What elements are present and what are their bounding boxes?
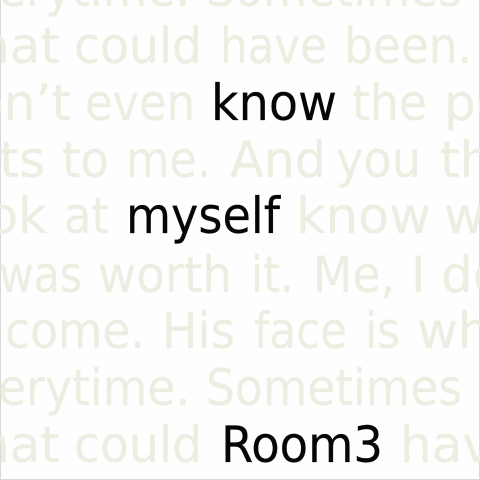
background lyric text: And — [230, 131, 326, 189]
background lyric text: could — [74, 17, 202, 75]
background lyric text: erytime. — [0, 359, 190, 417]
background lyric text: is — [365, 302, 400, 360]
background lyric text: His — [162, 302, 235, 360]
background lyric text: face — [254, 302, 347, 360]
background lyric text: Me, — [313, 246, 395, 304]
background lyric text: Sometimes — [206, 359, 462, 417]
background lyric text: ts — [0, 131, 45, 189]
background lyric text: come. — [5, 302, 145, 360]
word: myself: myself — [126, 187, 281, 245]
background lyric text: even — [85, 74, 195, 132]
background lyric text: worth — [98, 246, 232, 304]
background lyric text: you — [336, 131, 421, 189]
background lyric text: the — [352, 74, 427, 132]
background lyric text: to — [62, 131, 109, 189]
background lyric text: at — [64, 187, 109, 245]
background lyric text: could — [74, 416, 202, 474]
word: know: know — [211, 74, 337, 132]
background lyric text: know — [296, 187, 431, 245]
background lyric text: have — [220, 17, 327, 75]
background lyric text: it. — [251, 246, 294, 304]
word: Room3: Room3 — [221, 416, 383, 474]
background lyric text: was — [0, 246, 82, 304]
background lyric text: me. — [126, 131, 211, 189]
background lyric text: I — [411, 246, 426, 304]
